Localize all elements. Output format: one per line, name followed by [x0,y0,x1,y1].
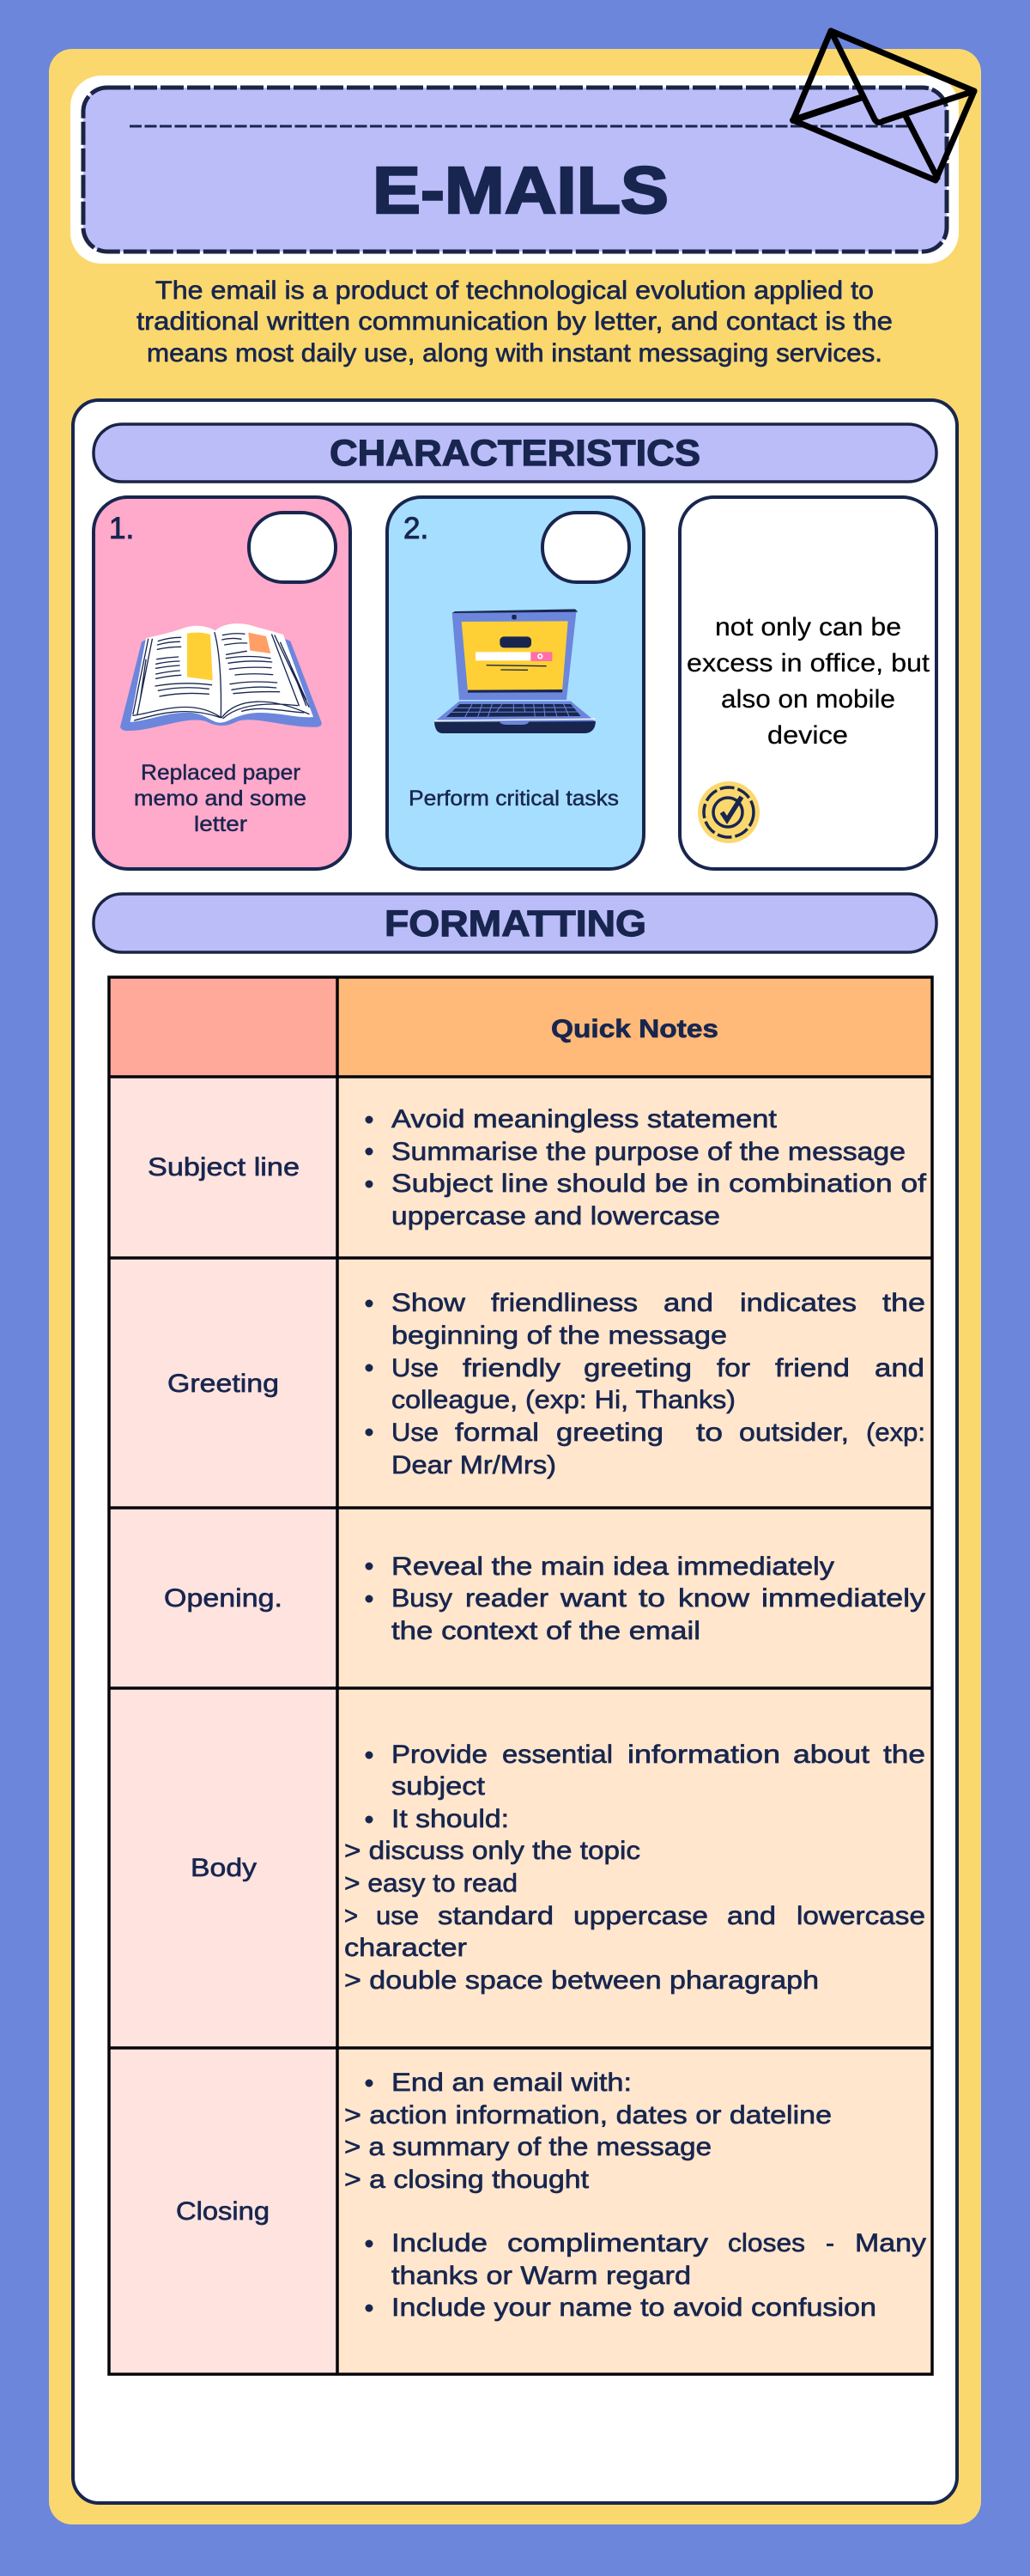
intro paragraph: The email is a product of technological evolution applied to [155,276,874,305]
icon: envelope [793,31,974,180]
row: body: uppercase [573,1902,708,1930]
row: greeting: greeting [556,1419,663,1447]
intro paragraph: traditional written communication by letter, and contact is the [136,307,893,336]
row: opening: to [639,1584,665,1613]
card 3 text: also on mobile [721,685,895,714]
row: closing: complimentary [507,2229,708,2257]
row: greeting: Greeting [167,1370,279,1398]
row: body: character [344,1934,467,1962]
row: closing: Include your name to avoid confusion [391,2293,876,2322]
panel: card 3 [680,497,936,869]
row: greeting: for [717,1354,750,1382]
row: body: It should: [391,1805,509,1833]
heading: characteristics: CHARACTERISTICS [330,433,700,474]
card 3 text: device [767,721,848,750]
card 3 text: excess in office, but [687,649,930,677]
card 3 text [687,613,930,750]
row: greeting: the [882,1289,925,1317]
panel: card 2: 2. [403,512,428,545]
row: body [191,1741,925,1995]
row: greeting: Use [391,1419,439,1447]
heading: characteristics [94,424,936,482]
row: greeting: indicates [740,1289,857,1317]
table header: quick notes: Quick Notes [551,1015,718,1043]
icon: check badge [698,781,760,843]
row: greeting [167,1289,925,1479]
row: greeting: friendly [463,1354,560,1382]
row: closing: > a summary of the message [344,2133,712,2161]
row: closing: thanks or Warm regard [391,2262,691,2290]
row: closing: closes [728,2229,805,2257]
row: opening: reader [465,1584,548,1613]
row: body: information [627,1741,780,1769]
row: greeting: friend [775,1354,850,1382]
row: greeting: and [663,1289,713,1317]
panel: card 2 [387,497,644,869]
row: greeting: (exp: [866,1419,925,1447]
row: body: > [344,1902,358,1930]
row: opening: Busy [391,1584,452,1613]
row: closing: - [826,2229,834,2257]
row: closing [176,2069,926,2322]
panel: title banner [70,76,959,264]
panel: card 1 [94,497,350,869]
card 1 text: memo and some [134,787,306,811]
icon: open book [120,623,322,731]
row: body: and [727,1902,776,1930]
row: greeting: beginning of the message [391,1321,727,1350]
row: body: standard [438,1902,554,1930]
heading: formatting: FORMATTING [385,903,646,945]
card 1 text: letter [194,812,247,836]
row: opening: know [678,1584,750,1613]
panel: white content area [73,400,957,2503]
row: opening: immediately [761,1584,925,1613]
row: subject line: Subject line [148,1153,300,1182]
row: subject line: Summarise the purpose of the message [391,1138,906,1166]
row: closing: Many [855,2229,926,2257]
row: greeting: outsider, [739,1419,849,1447]
intro paragraph: means most daily use, along with instant messaging services. [147,339,882,368]
row: body: > double space between pharagraph [344,1966,819,1995]
row: greeting: formal [455,1419,539,1447]
row: greeting: and [875,1354,924,1382]
row: opening: want [560,1584,627,1613]
row: body: > easy to read [344,1869,518,1898]
intro paragraph [136,276,893,368]
row: closing: > action information, dates or dateline [344,2101,832,2129]
row: subject line [148,1105,927,1230]
row: body: subject [391,1772,485,1801]
row: body: about [793,1741,869,1769]
row: body: Body [191,1854,257,1882]
row: greeting: friendliness [491,1289,638,1317]
row: subject line: Avoid meaningless statement [391,1105,777,1133]
row: greeting: Use [391,1354,439,1382]
row: greeting: Show [391,1289,466,1317]
icon: laptop [434,609,596,733]
row: greeting: greeting [584,1354,692,1382]
row: opening: the context of the email [391,1617,700,1645]
row: closing: End an email with: [391,2069,632,2097]
row: closing: > a closing thought [344,2166,589,2194]
panel: card 1: 1. [109,512,134,545]
row: body: use [376,1902,419,1930]
row: opening [164,1552,925,1645]
row: opening: Opening. [164,1584,282,1613]
table: formatting quick notes [109,977,932,2374]
row: opening: Reveal the main idea immediately [391,1552,834,1581]
card 2 text: Perform critical tasks [409,787,619,811]
row: body: the [883,1741,925,1769]
row: greeting: colleague, (exp: Hi, Thanks) [391,1386,736,1414]
row: subject line: Subject line should be in combination of [391,1170,927,1198]
card 1 text: Replaced paper [141,761,300,785]
heading: formatting [94,894,936,952]
row: body: essential [502,1741,613,1769]
card 3 text: not only can be [715,613,901,641]
title: E-MAILS [373,154,669,228]
row: closing: Include [391,2229,488,2257]
row: closing: Closing [176,2197,270,2226]
row: body: lowercase [797,1902,925,1930]
row: body: > discuss only the topic [344,1837,640,1865]
row: body: Provide [391,1741,488,1769]
row: greeting: Dear Mr/Mrs) [391,1451,556,1479]
card 1 text [134,761,306,836]
row: greeting: to [696,1419,723,1447]
row: subject line: uppercase and lowercase [391,1202,720,1230]
